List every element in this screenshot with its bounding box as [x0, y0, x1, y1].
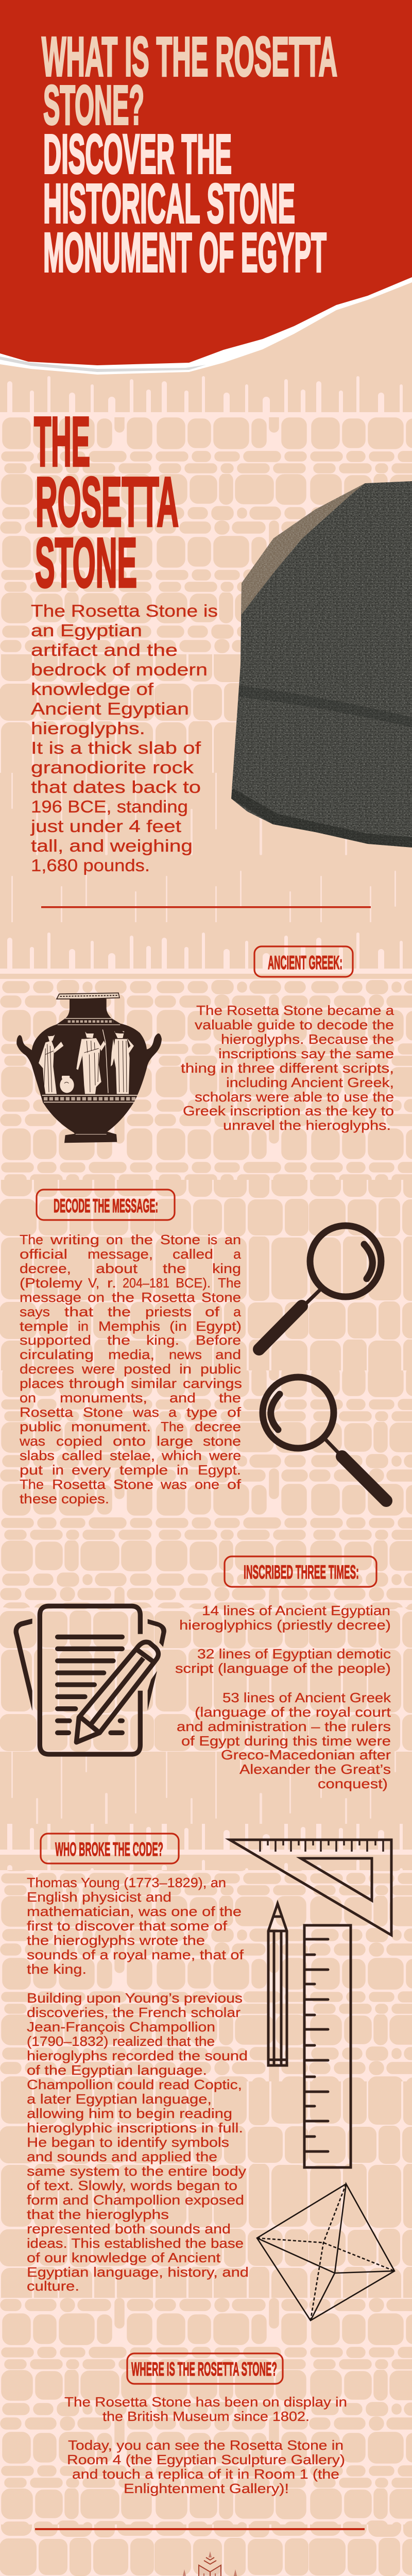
intro paragraph: Ancient Egyptian [31, 700, 189, 719]
image: Rosetta Stone [227, 477, 412, 855]
icon: document and pencil [13, 1606, 166, 1754]
Decode paragraph: of [227, 1477, 242, 1492]
Decode paragraph: decree [195, 1419, 241, 1434]
Decode paragraph: V, [88, 1275, 99, 1291]
Decode paragraph: message [20, 1290, 81, 1305]
intro paragraph: The Rosetta Stone is [31, 602, 218, 621]
intro paragraph: knowledge of [31, 680, 154, 699]
Inscribed paragraph: and administration – the rulers [177, 1719, 391, 1734]
label: Inscribed three times [225, 1556, 376, 1587]
Who broke the code paragraph: Egyptian language, history, and [27, 2264, 249, 2280]
Who broke the code paragraph: Thomas Young (1773–1829), an [27, 1875, 226, 1890]
Decode paragraph: stone [203, 1433, 241, 1449]
Decode paragraph: large [157, 1433, 193, 1449]
Decode paragraph: of [205, 1304, 220, 1319]
Inscribed paragraph: (language of the royal court [195, 1704, 391, 1720]
Ancient Greek paragraph: scholars were able to use the [195, 1089, 394, 1105]
Where paragraph [64, 2394, 347, 2496]
Decode paragraph: through [69, 1376, 125, 1391]
Decode paragraph: writing [50, 1232, 99, 1247]
Who broke the code paragraph: Building upon Young’s previous [27, 1990, 243, 2006]
Decode paragraph: put [20, 1462, 43, 1478]
Decode paragraph: an [225, 1232, 241, 1247]
Decode paragraph: circulating [20, 1347, 94, 1362]
Decode paragraph: supported [20, 1332, 91, 1348]
Decode paragraph: the [131, 1232, 153, 1247]
Ancient Greek paragraph: including Ancient Greek, [226, 1075, 394, 1090]
Who broke the code paragraph: (1790–1832) realized that the [27, 2033, 215, 2049]
Decode paragraph: was [132, 1404, 159, 1420]
Decode paragraph: the [107, 1332, 130, 1348]
Decode paragraph: king [212, 1261, 241, 1276]
Decode paragraph: (Ptolemy [20, 1275, 82, 1291]
Decode paragraph: and [169, 1390, 196, 1405]
Decode paragraph: slabs [20, 1448, 55, 1463]
Decode paragraph: 204–181 [123, 1275, 169, 1291]
Decode paragraph: the [112, 1290, 134, 1305]
Decode paragraph: stelae, [110, 1448, 155, 1463]
label: Ancient Greek [254, 946, 353, 977]
Decode paragraph: says [20, 1304, 50, 1319]
Decode paragraph: onto [113, 1433, 146, 1449]
Inscribed paragraph: of Egypt during this time were [181, 1733, 391, 1749]
Decode paragraph: decree, [20, 1261, 71, 1276]
logo: My Modern Met buildings [170, 2551, 250, 2576]
Decode paragraph: which [161, 1448, 202, 1463]
Inscribed paragraph: Alexander the Great’s [239, 1761, 391, 1777]
Decode paragraph: BCE). [176, 1275, 211, 1291]
Decode paragraph: similar [131, 1376, 177, 1391]
Decode paragraph: copies. [61, 1491, 109, 1506]
Inscribed paragraph: 32 lines of Egyptian demotic [197, 1646, 391, 1662]
Decode paragraph: the [219, 1390, 241, 1405]
Decode paragraph: these [20, 1491, 57, 1506]
intro paragraph: artifact and the [31, 641, 178, 660]
Decode paragraph: was [160, 1477, 187, 1492]
Where paragraph: Room 4 (the Egyptian Sculpture Gallery) [67, 2452, 345, 2467]
divider [35, 2528, 365, 2530]
Inscribed paragraph [175, 1603, 391, 1791]
Who broke the code paragraph: Champollion could read Coptic, [27, 2077, 242, 2092]
Ancient Greek paragraph: inscriptions say the same [218, 1046, 394, 1061]
Decode paragraph: about [96, 1261, 138, 1276]
Who broke the code paragraph: English physicist and [27, 1889, 171, 1905]
Decode paragraph: a [233, 1246, 242, 1262]
Who broke the code paragraph: mathematician, was one of the [27, 1904, 242, 1919]
Decode paragraph: The [20, 1477, 44, 1492]
Decode paragraph: the [163, 1261, 186, 1276]
Decode paragraph: official [20, 1246, 67, 1262]
label: Who broke the code [41, 1834, 179, 1863]
intro paragraph: 196 BCE, standing [31, 798, 188, 817]
Decode paragraph: (in [169, 1318, 187, 1334]
Decode paragraph: on [88, 1290, 105, 1305]
icon: set square [230, 1840, 391, 1935]
Ancient Greek paragraph: hieroglyphs. Because the [221, 1031, 394, 1047]
Who broke the code paragraph: He began to identify symbols [27, 2134, 229, 2150]
Decode paragraph: carvings [183, 1376, 242, 1391]
Who broke the code paragraph: of our knowledge of Ancient [27, 2250, 221, 2265]
Decode paragraph: public [200, 1361, 241, 1377]
Where paragraph: Today, you can see the Rosetta Stone in [68, 2437, 344, 2453]
Who broke the code paragraph: a later Egyptian language, [27, 2091, 212, 2107]
Who broke the code paragraph: Jean-François Champollion [27, 2019, 215, 2035]
Decode paragraph: Stone [201, 1290, 241, 1305]
title: STONE? [43, 74, 144, 136]
Ancient Greek paragraph: unravel the hieroglyphs. [223, 1117, 391, 1133]
intro paragraph: that dates back to [31, 778, 201, 797]
Decode paragraph: king. [146, 1332, 179, 1348]
intro paragraph: It is a thick slab of [31, 739, 201, 758]
Who broke the code paragraph: and sounds and applied the [27, 2149, 217, 2164]
Inscribed paragraph: 14 lines of Ancient Egyptian [202, 1603, 390, 1618]
label: Decode the message [37, 1190, 175, 1220]
divider [41, 906, 371, 908]
Who broke the code paragraph: hieroglyphic inscriptions in full. [27, 2120, 243, 2136]
Who broke the code paragraph: represented both sounds and [27, 2221, 231, 2236]
Decode paragraph: temple [20, 1318, 68, 1334]
Decode paragraph: Rosetta [141, 1290, 196, 1305]
Decode paragraph: Rosetta [52, 1477, 106, 1492]
Inscribed paragraph: conquest) [318, 1776, 388, 1791]
Who broke the code paragraph: the king. [27, 1961, 87, 1977]
Decode paragraph: monuments, [60, 1390, 147, 1405]
Decode paragraph: r. [107, 1275, 116, 1291]
Decode paragraph: one [195, 1477, 219, 1492]
Decode paragraph: on [20, 1390, 36, 1405]
Decode paragraph: posted [124, 1361, 171, 1377]
Who broke the code paragraph: that the hieroglyphs [27, 2207, 169, 2222]
Who broke the code paragraph: discoveries, the French scholar [27, 2005, 241, 2020]
intro paragraph: 1,680 pounds. [31, 856, 150, 875]
Inscribed paragraph: 53 lines of Ancient Greek [222, 1690, 391, 1705]
Who broke the code paragraph: first to discover that some of [27, 1918, 228, 1934]
text: ROSETTA [36, 463, 179, 541]
heading: The Rosetta Stone: THE [34, 402, 90, 481]
Decode paragraph: type [186, 1404, 217, 1420]
Decode paragraph: public [20, 1419, 61, 1434]
Decode paragraph: media, [108, 1347, 154, 1362]
Ancient Greek paragraph: valuable guide to decode the [195, 1017, 394, 1032]
icon: magnifying glass, upper [259, 1226, 381, 1349]
Decode paragraph: on [106, 1232, 123, 1247]
intro paragraph: just under 4 feet [30, 817, 182, 836]
Decode paragraph: in [179, 1361, 192, 1377]
Decode paragraph: Stone [113, 1477, 153, 1492]
Decode paragraph: The [20, 1232, 43, 1247]
Decode paragraph: copied [56, 1433, 102, 1449]
icon: ruler [304, 1925, 351, 2167]
title [42, 25, 337, 283]
Decode paragraph: a [168, 1404, 177, 1420]
Decode paragraph: priests [145, 1304, 192, 1319]
Who broke the code paragraph: allowing him to begin reading [27, 2106, 232, 2121]
Ancient Greek paragraph: Greek inscription as the key to [183, 1103, 394, 1118]
Who broke the code paragraph: form and Champollion exposed [27, 2192, 244, 2208]
Who broke the code paragraph: same system to the entire body [27, 2163, 246, 2179]
Decode paragraph: Memphis [98, 1318, 160, 1334]
Who broke the code paragraph [27, 1875, 249, 2294]
Who broke the code paragraph: of the Egyptian language. [27, 2062, 207, 2078]
Inscribed paragraph: script (language of the people) [175, 1660, 391, 1676]
Who broke the code paragraph: ideas. This established the base [27, 2235, 244, 2251]
intro paragraph: granodiorite rock [31, 758, 194, 777]
Decode paragraph: is [208, 1232, 217, 1247]
Who broke the code paragraph: culture. [27, 2278, 79, 2294]
intro paragraph: bedrock of modern [31, 660, 208, 680]
icon: Greek vase [16, 993, 162, 1143]
Decode paragraph: temple [119, 1462, 168, 1478]
Decode paragraph: in [52, 1462, 64, 1478]
Where paragraph: Enlightenment Gallery)! [124, 2481, 289, 2496]
intro paragraph: tall, and weighing [31, 837, 193, 856]
Where paragraph: and touch a replica of it in Room 1 (the [72, 2466, 339, 2482]
Decode paragraph: in [78, 1318, 89, 1334]
Decode paragraph: Stone [83, 1404, 123, 1420]
Where paragraph: The Rosetta Stone has been on display in [64, 2394, 347, 2410]
Decode paragraph: news [169, 1347, 202, 1362]
Decode paragraph: Egypt) [196, 1318, 242, 1334]
Decode paragraph: that [64, 1304, 94, 1319]
Decode paragraph: called [62, 1448, 102, 1463]
icon: octahedron [257, 2184, 394, 2320]
Who broke the code paragraph: sounds of a royal name, that of [27, 1947, 244, 1962]
label: Where is the Rosetta Stone [127, 2353, 283, 2384]
Decode paragraph: called [173, 1246, 213, 1262]
Decode paragraph: were [209, 1448, 241, 1463]
Decode paragraph [19, 1232, 242, 1506]
Decode paragraph: Rosetta [20, 1404, 74, 1420]
Decode paragraph: was [19, 1433, 45, 1449]
Decode paragraph: decrees [20, 1361, 74, 1377]
Decode paragraph: Egypt. [198, 1462, 241, 1478]
Who broke the code paragraph: hieroglyphs recorded the sound [27, 2048, 248, 2063]
Who broke the code paragraph: the hieroglyphs wrote the [27, 1933, 205, 1948]
heading: The Rosetta Stone: STONE [35, 523, 137, 602]
icon: pencil [268, 1904, 287, 2065]
Inscribed paragraph: Greco-Macedonian after [221, 1747, 391, 1762]
Decode paragraph: in [177, 1462, 188, 1478]
Decode paragraph: and [215, 1347, 241, 1362]
Decode paragraph: a [233, 1304, 242, 1319]
intro paragraph [30, 602, 218, 875]
Decode paragraph: every [72, 1462, 111, 1478]
Inscribed paragraph: hieroglyphics (priestly decree) [179, 1617, 391, 1633]
Decode paragraph: message, [88, 1246, 153, 1262]
Decode paragraph: were [81, 1361, 115, 1377]
Decode paragraph: The [218, 1275, 241, 1291]
Decode paragraph: of [227, 1404, 242, 1420]
icon: magnifying glass, lower [263, 1377, 386, 1501]
Ancient Greek paragraph [181, 1003, 394, 1133]
Decode paragraph: places [20, 1376, 64, 1391]
Decode paragraph: Stone [160, 1232, 200, 1247]
Decode paragraph: The [161, 1419, 184, 1434]
intro paragraph: an Egyptian [31, 621, 142, 640]
label: Decode the message: DECODE THE MESSAGE: [54, 1195, 158, 1216]
Ancient Greek paragraph: thing in three different scripts, [181, 1060, 394, 1076]
Decode paragraph: Before [196, 1332, 241, 1348]
label: Who broke the code: WHO BROKE THE CODE? [55, 1839, 163, 1860]
Who broke the code paragraph: of text. Slowly, words began to [27, 2178, 237, 2193]
Ancient Greek paragraph: The Rosetta Stone became a [196, 1003, 394, 1018]
Decode paragraph: the [108, 1304, 131, 1319]
red header banner with torn edge [0, 0, 412, 375]
Decode paragraph: monument. [71, 1419, 151, 1434]
heading: The Rosetta Stone [34, 402, 179, 602]
Where paragraph: the British Museum since 1802. [102, 2409, 310, 2424]
intro paragraph: hieroglyphs. [31, 719, 145, 738]
